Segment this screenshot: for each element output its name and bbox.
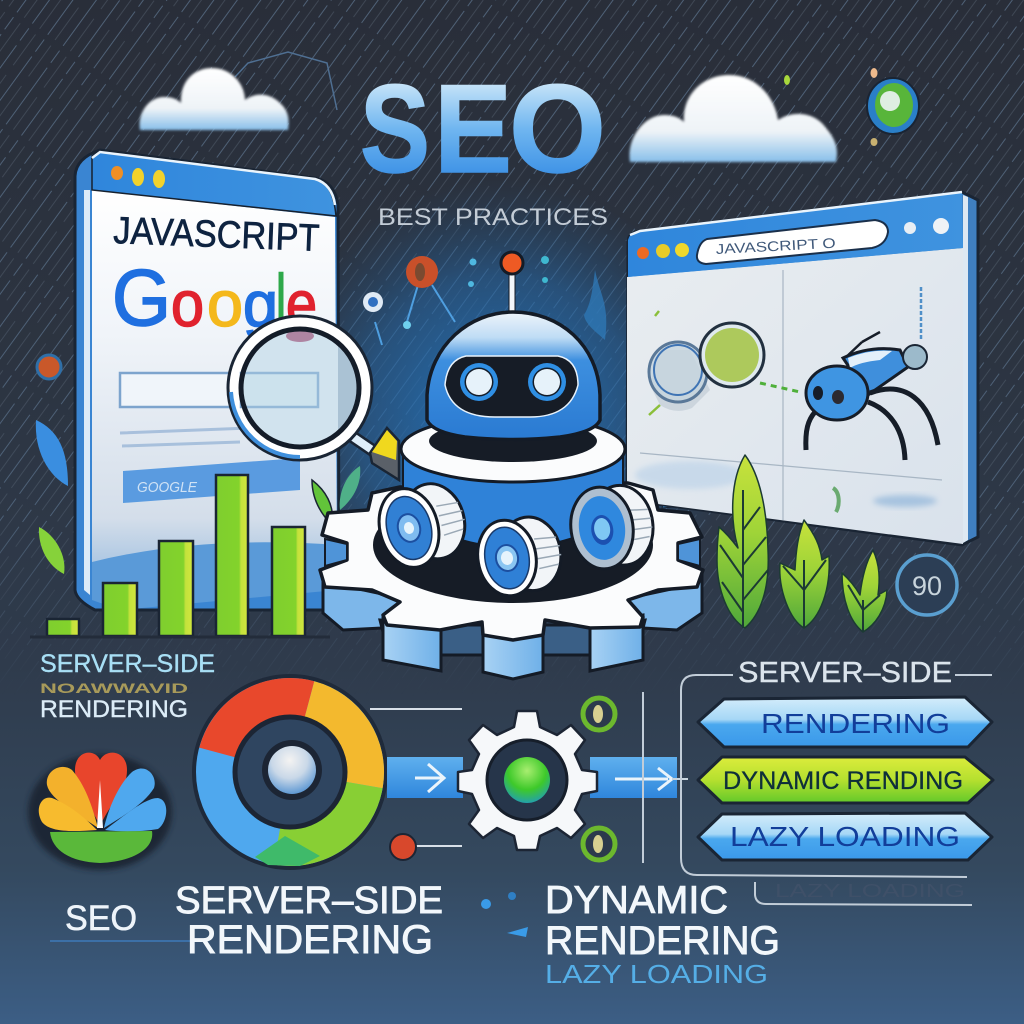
list: rendering pill: RENDERING [761, 708, 950, 739]
faded ghost label: LAZY LOADING [775, 881, 965, 901]
icon: left side decorations [36, 355, 68, 574]
panel: left browser [75, 150, 339, 610]
browser dots [637, 218, 949, 259]
list heading: SERVER–SIDE [738, 657, 952, 689]
text lines [120, 428, 250, 446]
browser dots [111, 166, 165, 188]
icon: colorful ring [192, 674, 388, 870]
bottom label: server-side rendering: RENDERING [187, 918, 433, 962]
dome head [427, 312, 600, 440]
title: E [434, 60, 512, 199]
green ring bottom [583, 828, 615, 860]
google logo: e [286, 268, 317, 340]
connector lines [370, 709, 462, 846]
robot eyes [460, 363, 566, 401]
bottom label: dynamic rendering, lazy loading [545, 879, 780, 989]
left label: server-side rendering: SERVER–SIDE [40, 650, 215, 678]
icon: network nodes [363, 256, 606, 345]
green mark [833, 488, 839, 512]
small leaves behind gear [312, 466, 695, 525]
search box [120, 373, 318, 407]
gear notches [325, 539, 700, 566]
bottom label: dynamic rendering, lazy loading: RENDERING [545, 919, 780, 963]
title: O [509, 60, 606, 199]
wheel right [566, 480, 658, 573]
search button [123, 458, 300, 503]
address bar: JAVASCRIPT O [715, 235, 836, 257]
bottom label: server-side rendering: SERVER–SIDE [175, 880, 443, 922]
robot on gear [320, 252, 703, 679]
small plant [842, 550, 887, 632]
google logo: o [171, 268, 204, 340]
robot body [403, 450, 623, 548]
badge 90 [897, 555, 957, 615]
panel: right browser [627, 192, 978, 545]
large plant [717, 455, 768, 628]
bottom label: dynamic rendering, lazy loading: LAZY LOADING [545, 959, 768, 989]
wheel middle [472, 511, 567, 600]
decorative dots [481, 892, 528, 937]
wheel left [371, 475, 473, 574]
title [360, 60, 606, 199]
cloud left [140, 68, 289, 130]
icon: planet [784, 68, 919, 146]
bottom label: dynamic rendering, lazy loading: DYNAMIC [545, 879, 728, 922]
bottom label: server-side rendering [175, 880, 443, 962]
underline [50, 940, 190, 942]
cloud right [629, 75, 837, 162]
subtitle: BEST PRACTICES [378, 204, 608, 231]
left label: server-side rendering: NOAWWAVID [40, 680, 188, 696]
list: lazy loading pill: LAZY LOADING [730, 821, 960, 852]
google logo: l [276, 261, 286, 341]
bracket lines [643, 675, 992, 905]
medium plant [780, 520, 829, 628]
left label: server-side rendering [40, 650, 215, 723]
face visor [445, 356, 578, 417]
google logo [112, 253, 317, 342]
gear [320, 483, 703, 640]
google logo: g [243, 268, 278, 340]
arrow: ring to gear [387, 757, 463, 798]
list: lazy loading pill [698, 813, 992, 860]
google logo: o [207, 268, 243, 340]
dark platform [373, 487, 653, 603]
search button: GOOGLE [137, 479, 198, 496]
arrow: gear to list [590, 757, 688, 798]
spider bot [806, 287, 938, 460]
gear base shadow block [323, 575, 702, 679]
title: S [360, 60, 430, 199]
sketch outline behind cloud [235, 52, 337, 110]
badge 90: 90 [912, 571, 942, 601]
bar chart [30, 475, 330, 637]
green ring top [583, 698, 615, 730]
left label: server-side rendering: RENDERING [40, 696, 188, 723]
icon: colorful flower logo [28, 753, 172, 870]
list: dynamic rendering pill [698, 757, 993, 803]
google logo: G [112, 253, 171, 342]
icon: small gear [458, 711, 597, 850]
red dot [390, 834, 416, 860]
bottom label: seo: SEO [65, 899, 137, 938]
address bar [697, 220, 888, 264]
list: dynamic rendering pill: DYNAMIC RENDING [723, 767, 963, 795]
icon: plants [717, 455, 887, 632]
collar [401, 416, 625, 482]
lens circles [649, 311, 800, 415]
list: rendering pill [698, 697, 992, 747]
icon: magnifying glass [228, 316, 399, 480]
antenna [501, 252, 523, 312]
javascript label: JAVASCRIPT [113, 210, 320, 260]
